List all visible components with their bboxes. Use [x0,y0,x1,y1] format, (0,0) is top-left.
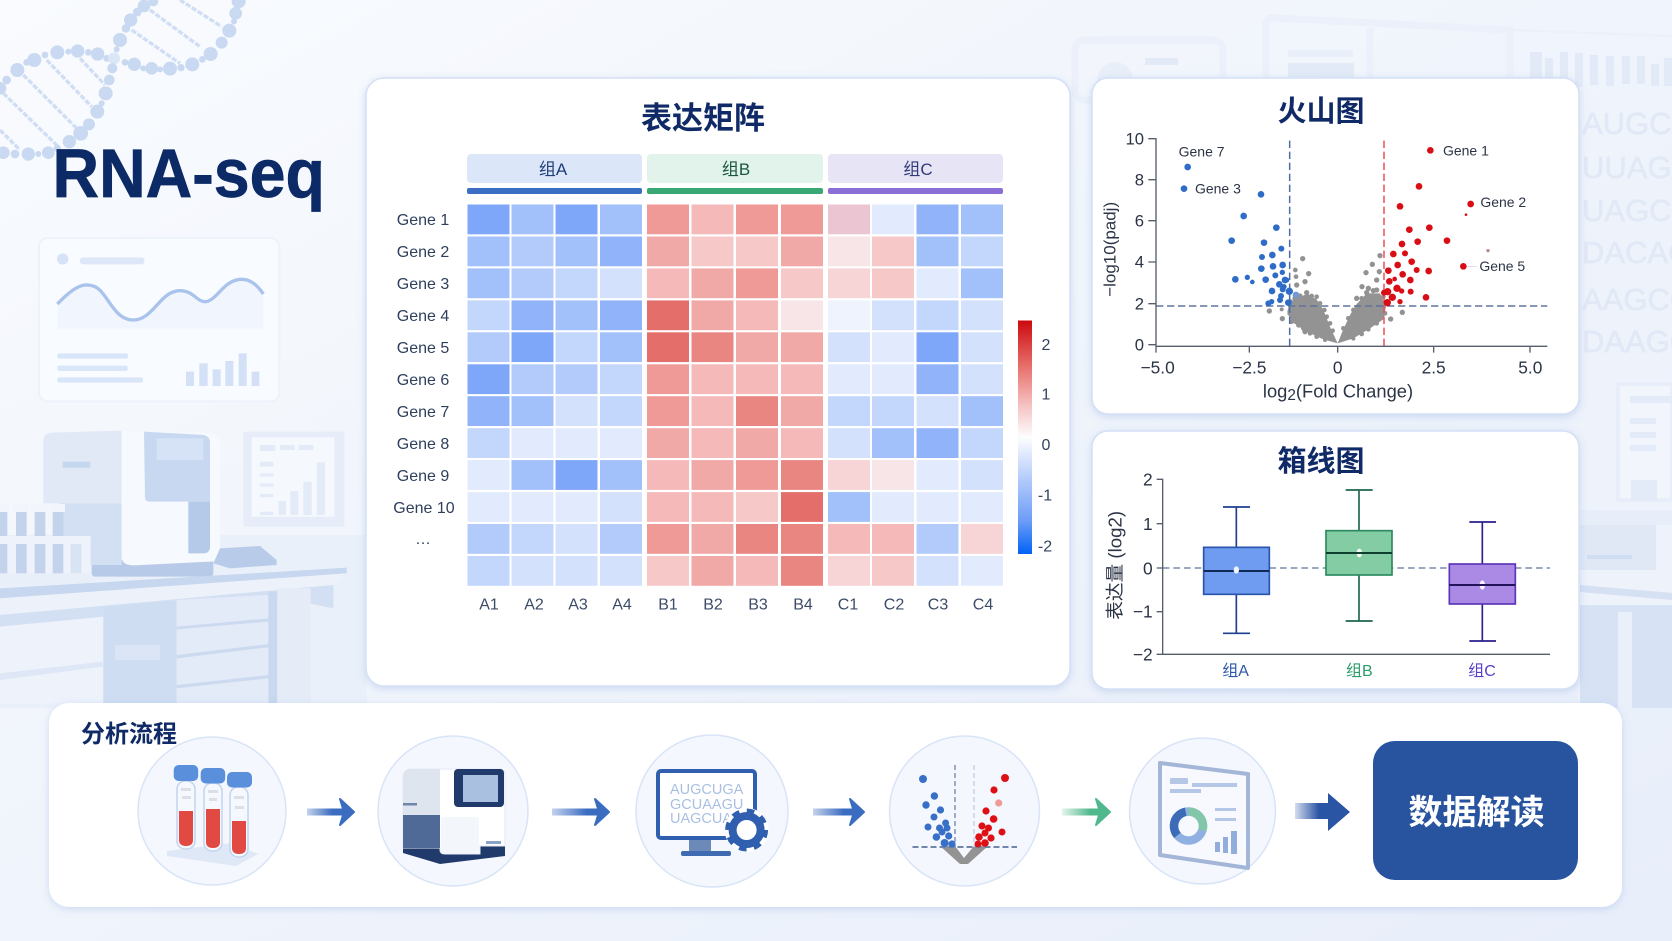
sample labels: A1 [479,596,499,614]
group labels: 组A [1222,662,1249,680]
background: top right bars [1097,50,1672,98]
axis tick labels: 0 [1135,335,1144,354]
icon: monitor with sequence and gear: AUGCUGA [670,782,744,798]
arrow 3 [813,799,864,825]
group header: B: 组B [722,160,750,179]
gene labels: Gene 8 [397,436,449,453]
arrow 2 [552,799,609,825]
group labels: 组C [1468,662,1496,680]
arrow 4 [1062,799,1110,825]
background: DNA helix [0,0,246,161]
panel: expression matrix [366,78,1070,686]
colour scale legend: 0 [1042,437,1051,454]
sample labels: A4 [612,596,632,614]
sample labels: B4 [793,596,813,614]
sample labels: C1 [838,596,858,614]
sample labels: C3 [928,596,948,614]
icon: monitor with sequence and gear [658,771,769,856]
y tick labels: −1 [1133,602,1153,622]
gene labels: Gene 6 [397,372,449,389]
x tick labels: 2.5 [1422,358,1446,378]
sample labels: A2 [524,596,544,614]
sample labels: B2 [703,596,723,614]
axes [1157,479,1550,654]
icon: monitor with sequence and gear: GCUAAGU [670,797,743,813]
zero line [1163,566,1550,570]
sample labels: C2 [884,596,904,614]
heading: box plot: 箱线图 [1277,445,1365,478]
background: sequence letters [1582,106,1672,359]
axis tick labels: 4 [1135,253,1144,272]
sample labels: A3 [568,596,588,614]
axis tick labels [1125,130,1144,354]
group header: A [467,154,642,194]
arrow 5 [1295,793,1350,831]
volcano chart [1100,130,1547,404]
axis tick labels: 6 [1135,212,1144,231]
x tick labels [1141,358,1542,378]
sample labels: B3 [748,596,768,614]
box: group A [1204,507,1269,633]
y axis label: 表达量 (log2) [1105,511,1126,620]
icon: sequencer [403,769,505,864]
box: group B [1326,490,1392,621]
background: right lab desk [1578,378,1672,708]
x tick labels: 0 [1333,358,1342,378]
y tick labels [1133,470,1153,665]
gene annotations: Gene 1 [1443,142,1489,158]
box chart [1105,470,1550,680]
background: lab bench with sequencer [0,431,367,708]
x axis label: (Fold Change) [1296,380,1413,401]
sample labels [479,596,993,614]
heatmap [468,204,1003,586]
arrow 1 [307,799,354,825]
axis tick labels: 10 [1125,130,1144,149]
colour scale legend: -2 [1038,538,1052,556]
x axis label: 2 [1287,387,1296,404]
colour scale legend: -1 [1038,488,1052,504]
panel: analysis workflow [49,703,1622,907]
red up-regulated points [1381,147,1490,306]
panel: box plot [1092,431,1579,689]
group header: C [828,154,1003,194]
colour scale legend: 1 [1042,386,1051,404]
gene labels: Gene 7 [397,404,449,421]
gene annotations: Gene 2 [1480,194,1526,210]
gene labels: Gene 3 [397,276,449,293]
title: RNA-seq: RNA-seq [52,136,325,212]
icon: report with donut chart [1160,763,1248,868]
axes [1148,139,1547,353]
gene labels: Gene 10 [393,500,455,517]
group header: A: 组A [539,160,568,179]
group labels: 组B [1346,662,1373,680]
result box: data interpretation: 数据解读 [1408,794,1544,832]
sample labels: C4 [973,596,993,614]
gene labels: Gene 1 [397,212,449,229]
box: group C [1449,522,1515,641]
gene annotations: Gene 5 [1479,258,1525,274]
threshold lines [1156,141,1547,347]
heading: analysis workflow: 分析流程 [81,721,177,748]
x tick labels: −2.5 [1232,358,1266,378]
gene labels: Gene 4 [397,308,449,325]
background: top right screens [1075,18,1672,100]
blue down-regulated points [1181,164,1299,306]
x axis label: log [1263,380,1287,401]
gene labels: Gene 5 [397,340,449,357]
workflow circle backgrounds [138,735,1276,887]
icon: mini volcano plot [912,765,1017,864]
gene labels: … [415,531,431,548]
colour scale legend [1018,320,1052,556]
gene labels: Gene 9 [397,468,449,485]
group header: C: 组C [903,160,933,179]
group header: B [647,154,823,194]
gene annotations: Gene 3 [1195,181,1241,197]
y tick labels: 2 [1143,470,1153,490]
x tick labels: −5.0 [1141,358,1175,378]
panel: volcano plot [1092,78,1579,414]
gene labels [393,212,455,548]
gene annotations [1179,142,1526,274]
y tick labels: 1 [1143,514,1153,534]
axis tick labels: 8 [1135,171,1144,190]
heading: expression matrix: 表达矩阵 [641,101,765,136]
y tick labels: −2 [1133,645,1153,665]
grey non-significant points [1267,253,1405,343]
axis tick labels: 2 [1135,294,1144,313]
sample labels: B1 [658,596,678,614]
result box: data interpretation [1373,741,1578,880]
icon: test tubes [167,765,258,866]
gene labels: Gene 2 [397,244,449,261]
group labels [1222,662,1496,680]
colour scale legend: 2 [1042,337,1051,354]
y tick labels: 0 [1143,558,1153,578]
icon: monitor with sequence and gear: UAGCUAG [670,811,743,827]
y axis label: −log10(padj) [1100,202,1119,297]
gene annotations: Gene 7 [1179,144,1225,160]
background: dashboard card left [39,238,279,401]
x tick labels: 5.0 [1518,358,1542,378]
heading: volcano plot: 火山图 [1277,95,1365,128]
